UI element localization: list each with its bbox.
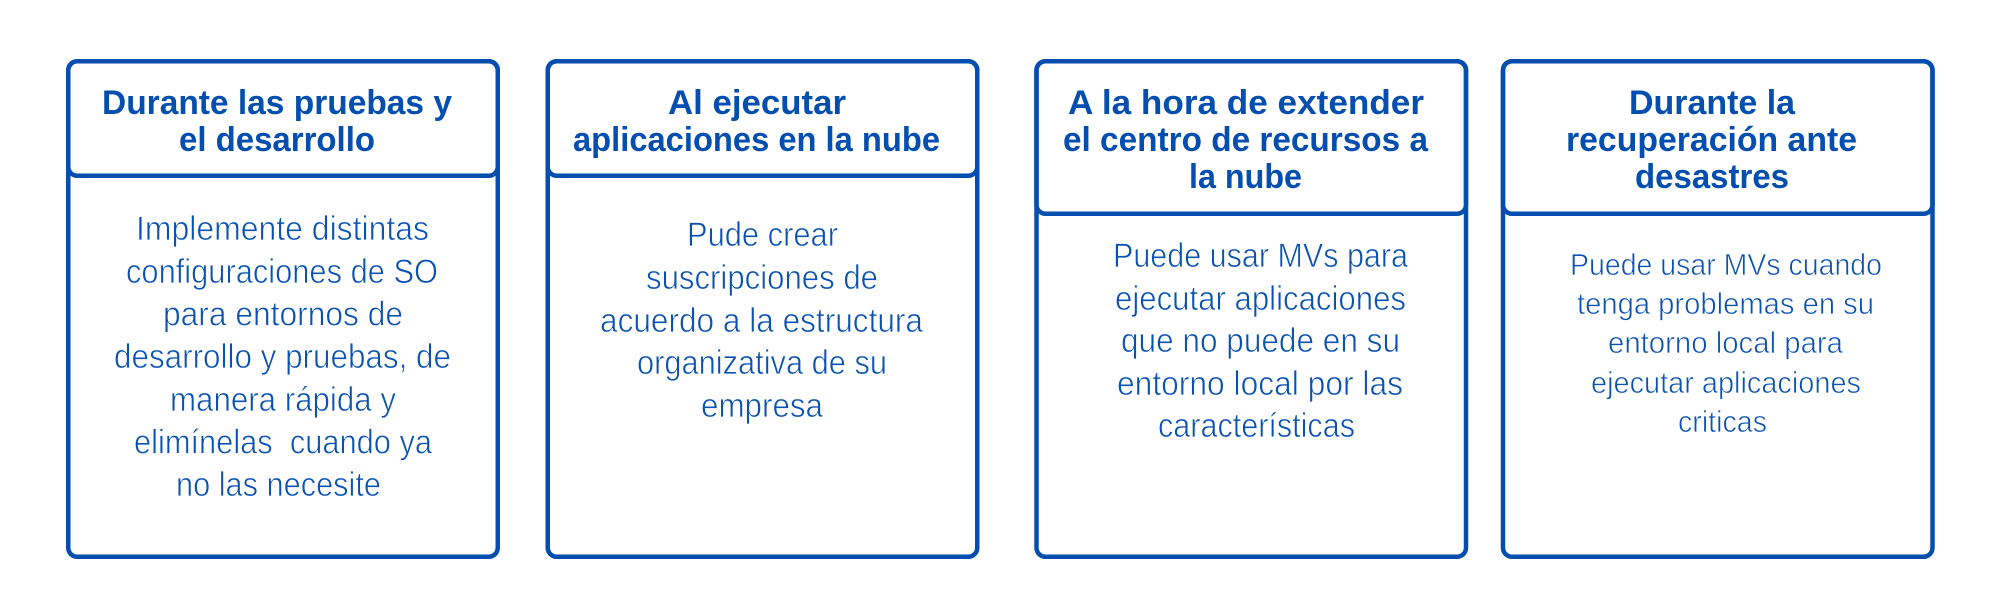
body text: Puede usar MVs cuando bbox=[1570, 247, 1882, 282]
body text: acuerdo a la estructura bbox=[600, 302, 923, 340]
body text: criticas bbox=[1678, 404, 1767, 439]
body text bbox=[114, 210, 451, 504]
heading: Durante las pruebas y bbox=[102, 84, 452, 122]
body text: elimínelas cuando ya bbox=[134, 424, 432, 462]
body text: ejecutar aplicaciones bbox=[1591, 365, 1861, 400]
body text: Puede usar MVs para bbox=[1113, 237, 1408, 275]
body text: manera rápida y bbox=[170, 381, 396, 419]
panel frame bbox=[1036, 61, 1466, 557]
heading: recuperación ante bbox=[1566, 121, 1857, 159]
panel: recuperación ante desastres bbox=[1503, 61, 1932, 557]
heading: Durante la bbox=[1629, 84, 1796, 122]
panel frame bbox=[1503, 61, 1932, 557]
heading: la nube bbox=[1189, 158, 1302, 196]
body text: configuraciones de SO bbox=[126, 253, 438, 291]
body text: no las necesite bbox=[176, 466, 381, 504]
body text: que no puede en su bbox=[1121, 322, 1400, 360]
body text: tenga problemas en su bbox=[1577, 286, 1874, 321]
heading: el desarrollo bbox=[179, 121, 375, 159]
panel frame bbox=[548, 61, 977, 557]
body text: organizativa de su bbox=[637, 344, 887, 382]
body text: desarrollo y pruebas, de bbox=[114, 338, 451, 376]
heading: desastres bbox=[1635, 158, 1789, 196]
heading frame bbox=[68, 61, 498, 176]
heading: el centro de recursos a bbox=[1063, 121, 1429, 159]
heading frame bbox=[1503, 61, 1932, 214]
panel: extender el centro de recursos bbox=[1036, 61, 1466, 557]
body text bbox=[600, 216, 923, 425]
body text: entorno local para bbox=[1608, 325, 1844, 360]
body text: Pude crear bbox=[687, 216, 838, 254]
body text: entorno local por las bbox=[1117, 365, 1403, 403]
body text: Implemente distintas bbox=[136, 210, 429, 248]
body text bbox=[1113, 237, 1408, 445]
heading: Al ejecutar bbox=[668, 84, 846, 122]
heading frame bbox=[548, 61, 977, 176]
panel: aplicaciones en la nube bbox=[548, 61, 977, 557]
body text: para entornos de bbox=[163, 296, 403, 334]
heading bbox=[1566, 84, 1857, 196]
heading frame bbox=[1036, 61, 1466, 214]
body text: características bbox=[1158, 407, 1355, 445]
heading: aplicaciones en la nube bbox=[573, 121, 940, 159]
panel frame bbox=[68, 61, 498, 557]
heading bbox=[102, 84, 452, 159]
heading bbox=[1063, 84, 1429, 196]
body text: suscripciones de bbox=[646, 259, 878, 297]
body text bbox=[1570, 247, 1882, 439]
panel: pruebas y desarrollo bbox=[68, 61, 498, 557]
heading bbox=[573, 84, 940, 159]
heading: A la hora de extender bbox=[1068, 84, 1424, 122]
body text: ejecutar aplicaciones bbox=[1115, 280, 1406, 318]
body text: empresa bbox=[701, 387, 823, 425]
